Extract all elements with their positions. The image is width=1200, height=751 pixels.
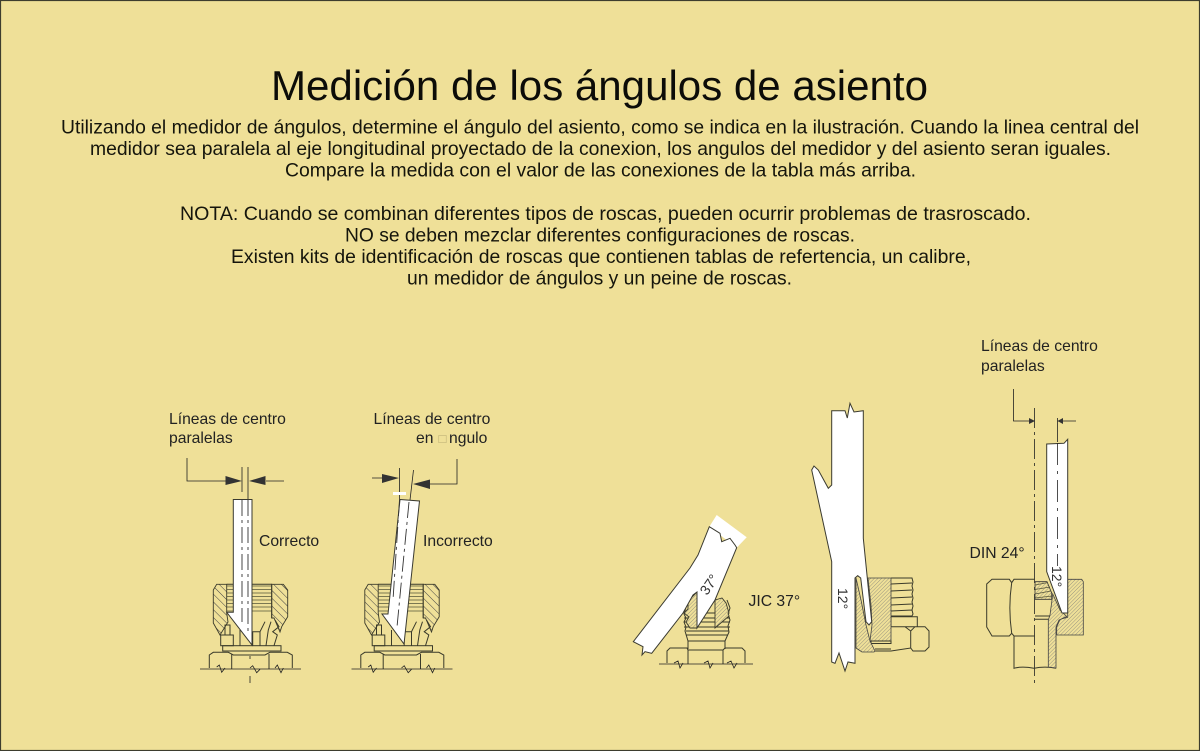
diagram: JIC 37	[633, 515, 800, 668]
long centre line	[1034, 408, 1036, 684]
text block: note	[180, 203, 1031, 290]
text block: note: NOTA: Cuando se combinan diferentes tipos de roscas, pueden ocurrir problemas de trasroscado.	[180, 203, 1031, 225]
seat angle label: 12°	[1049, 566, 1065, 587]
label: angled centre lines: ngulo	[449, 430, 488, 447]
diagram: DIN 24	[970, 338, 1098, 684]
hex end	[875, 617, 929, 651]
title: Medición de los ángulos de asiento	[271, 62, 928, 109]
threads	[891, 578, 913, 616]
gauge blade	[382, 492, 420, 644]
hex base	[667, 648, 745, 664]
label: parallel centre lines: paralelas	[169, 430, 233, 447]
dimension arrows	[1014, 389, 1076, 442]
diagram: correct measurement	[169, 411, 319, 683]
dimension arrows	[187, 458, 284, 500]
text block: instructions: Compare la medida con el valor de las conexiones de la tabla más arriba.	[285, 160, 916, 182]
text block: instructions: Utilizando el medidor de ángulos, determine el ángulo del asiento, como se indica en la ilustración. Cuando la linea central del	[61, 116, 1139, 138]
label: angled centre lines: en	[416, 430, 433, 447]
text block: note: Existen kits de identificación de roscas que contienen tablas de refertencia, un calibre,	[231, 246, 971, 268]
label: parallel centre lines: paralelas	[981, 358, 1045, 375]
label: angled centre lines: Líneas de centro	[374, 411, 491, 428]
diagram: 12 degree seat	[812, 403, 929, 671]
hatched nut body	[1057, 579, 1083, 635]
seat angle label: 37°	[696, 571, 722, 598]
threaded fitting	[200, 584, 301, 673]
gauge	[1047, 439, 1068, 613]
diagram: incorrect measurement	[352, 411, 493, 673]
threads	[684, 600, 730, 649]
hatched seat sections	[684, 592, 697, 628]
gauge blade	[227, 500, 252, 645]
centre line	[249, 656, 251, 683]
text block: instructions	[61, 116, 1139, 182]
label: DIN 24: DIN 24°	[970, 545, 1025, 562]
label: parallel centre lines: Líneas de centro	[981, 338, 1098, 355]
hatched nut	[868, 578, 891, 641]
hex nut	[987, 579, 1056, 668]
dimension arrows	[372, 459, 457, 500]
threaded fitting	[352, 584, 452, 673]
gauge centre line	[1056, 443, 1058, 566]
gauge	[633, 515, 747, 655]
seat angle label: 12°	[835, 588, 851, 609]
label: correct: Correcto	[259, 533, 319, 550]
label: angled centre lines: □	[438, 431, 446, 446]
threads	[1035, 582, 1052, 599]
tube	[1048, 594, 1067, 668]
gauge	[812, 403, 872, 671]
label: parallel centre lines: Líneas de centro	[169, 411, 286, 428]
text block: note: NO se deben mezclar diferentes configuraciones de roscas.	[345, 224, 855, 246]
base line	[659, 661, 753, 668]
label: JIC 37: JIC 37°	[748, 593, 800, 610]
text block: instructions: medidor sea paralela al eje longitudinal proyectado de la conexion, los angulos del medidor y del asiento seran iguales.	[90, 138, 1111, 160]
label: incorrect: Incorrecto	[423, 533, 493, 550]
text block: note: un medidor de ángulos y un peine de roscas.	[407, 268, 792, 290]
hatched seat	[856, 578, 875, 652]
